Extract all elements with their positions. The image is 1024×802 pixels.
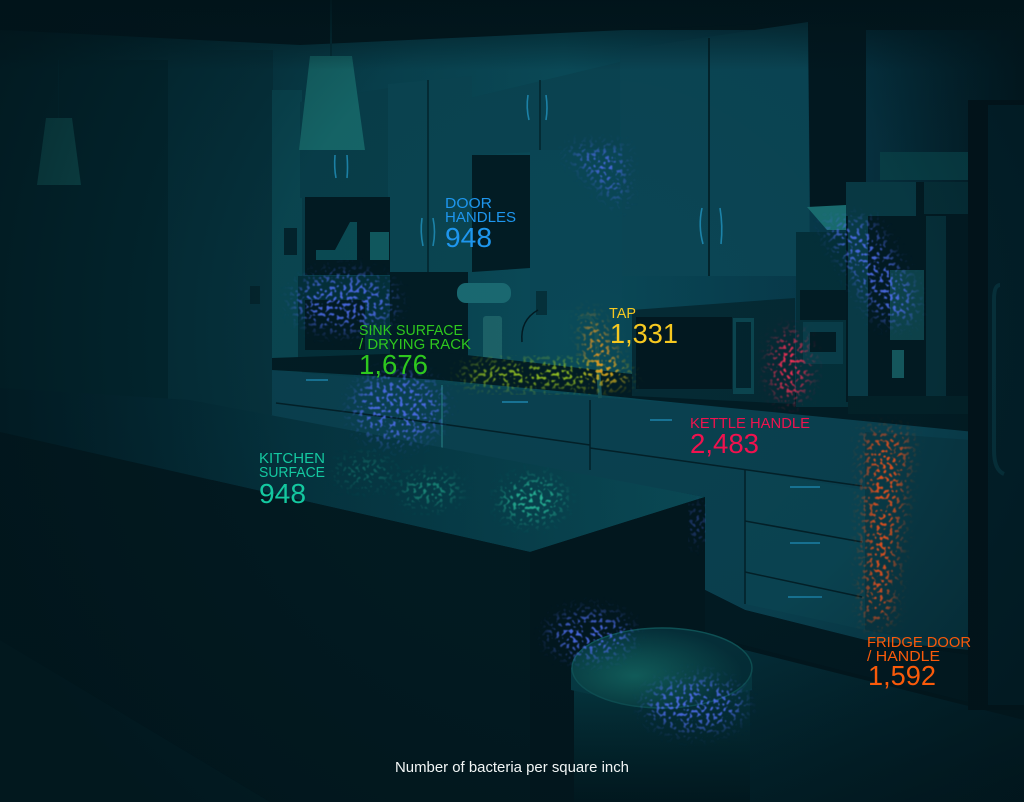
upper cabinets (272, 22, 866, 375)
bacteria cluster: tap (585, 312, 625, 382)
label: kitchen surface: SURFACE (259, 464, 325, 481)
bacteria cluster: kettle (772, 333, 808, 401)
bacteria cluster: fridge door (866, 432, 908, 622)
bacteria cluster: island surface right (502, 480, 562, 520)
label: sink surface / drying rack: SINK SURFACE (359, 322, 463, 339)
label: sink surface / drying rack: / DRYING RACK (359, 336, 471, 353)
label: fridge door / handle: FRIDGE DOOR (867, 634, 971, 651)
bacteria cluster: bin lid front (647, 680, 743, 730)
pendant lamps (37, 0, 365, 185)
bacteria cluster: wall cupboard corner (568, 150, 622, 205)
label: fridge door / handle: / HANDLE (867, 648, 940, 665)
kitchen island (0, 388, 705, 802)
label: kitchen surface: KITCHEN (259, 450, 325, 467)
bacteria cluster: bin lid back (550, 613, 630, 657)
label: door handles (445, 195, 516, 253)
label: tap: 1,331 (610, 318, 678, 349)
bacteria cluster: island surface left (337, 458, 393, 486)
bacteria cluster: island corner (692, 506, 702, 542)
coffee machines (796, 152, 990, 414)
label: sink surface / drying rack: 1,676 (359, 349, 428, 380)
label: door handles: HANDLES (445, 209, 516, 226)
label: kettle handle: KETTLE HANDLE (690, 415, 810, 432)
tap (578, 316, 600, 398)
label: fridge door / handle: 1,592 (868, 660, 936, 691)
bacteria cluster: island surface middle (402, 476, 458, 504)
label: fridge door / handle (867, 634, 971, 691)
label: kettle handle: 2,483 (690, 428, 759, 459)
lower cabinets and worktop (272, 352, 1000, 710)
label: door handles: 948 (445, 222, 492, 253)
label: sink surface / drying rack (359, 322, 471, 380)
label: kettle handle (690, 415, 810, 459)
waste bin (571, 628, 752, 802)
cabinet handles (306, 95, 822, 597)
label: tap: TAP (609, 305, 636, 322)
shelf appliance and wall fittings (250, 197, 547, 366)
label: tap (609, 305, 678, 349)
bacteria cluster: coffee machine (825, 222, 912, 320)
fridge (968, 100, 1024, 710)
caption: Number of bacteria per square inch (395, 760, 629, 776)
bacteria cluster: sink surface (460, 364, 630, 386)
microwave (632, 298, 795, 404)
label: kitchen surface (259, 450, 325, 509)
bacteria cluster: microwave shelf (295, 274, 395, 330)
bacteria cluster: cupboard under sink (354, 374, 442, 442)
label: door handles: DOOR (445, 195, 492, 212)
label: kitchen surface: 948 (259, 478, 306, 509)
